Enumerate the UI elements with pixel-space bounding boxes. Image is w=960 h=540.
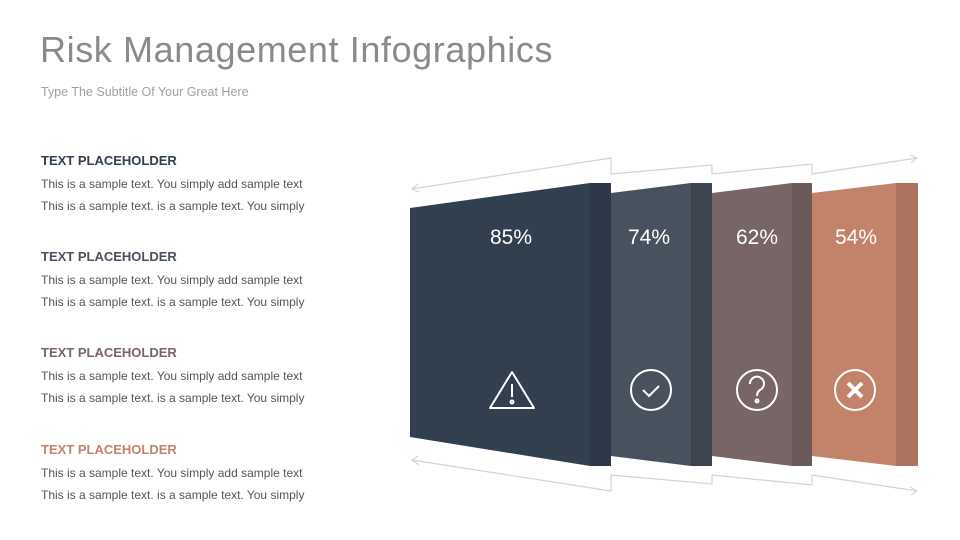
panel 3 62%: 62% xyxy=(736,226,778,249)
panel 1 85% xyxy=(410,183,611,466)
icon: check xyxy=(631,370,671,410)
text block 1 xyxy=(41,153,304,213)
text block 2: This is a sample text. is a sample text. You simply xyxy=(41,295,304,309)
panel 2 74%: 74% xyxy=(628,226,670,249)
text block 1: This is a sample text. You simply add sample text xyxy=(41,177,302,191)
text block 1: TEXT PLACEHOLDER xyxy=(41,153,177,168)
text block 4 xyxy=(41,442,304,502)
text block 3 xyxy=(41,345,304,405)
icon: warning xyxy=(490,372,534,408)
panel 2 74% xyxy=(611,183,712,466)
text block 2: TEXT PLACEHOLDER xyxy=(41,249,177,264)
text block 3: TEXT PLACEHOLDER xyxy=(41,345,177,360)
text block 4: This is a sample text. You simply add sample text xyxy=(41,466,302,480)
text block 3: This is a sample text. You simply add sample text xyxy=(41,369,302,383)
subtitle: Type The Subtitle Of Your Great Here xyxy=(41,85,249,99)
text block 2: This is a sample text. You simply add sample text xyxy=(41,273,302,287)
text block 3: This is a sample text. is a sample text. You simply xyxy=(41,391,304,405)
title: Risk Management Infographics xyxy=(40,29,553,70)
panel 1 85%: 85% xyxy=(490,226,532,249)
icon: cross xyxy=(835,370,875,410)
arrow bottom xyxy=(412,456,917,495)
text block 1: This is a sample text. is a sample text. You simply xyxy=(41,199,304,213)
panel 4 54% xyxy=(812,183,918,466)
panel 3 62% xyxy=(712,183,812,466)
text block 2 xyxy=(41,249,304,309)
arrow top xyxy=(412,155,917,192)
panel 4 54%: 54% xyxy=(835,226,877,249)
icon: question xyxy=(737,370,777,410)
text block 4: TEXT PLACEHOLDER xyxy=(41,442,177,457)
text block 4: This is a sample text. is a sample text. You simply xyxy=(41,488,304,502)
